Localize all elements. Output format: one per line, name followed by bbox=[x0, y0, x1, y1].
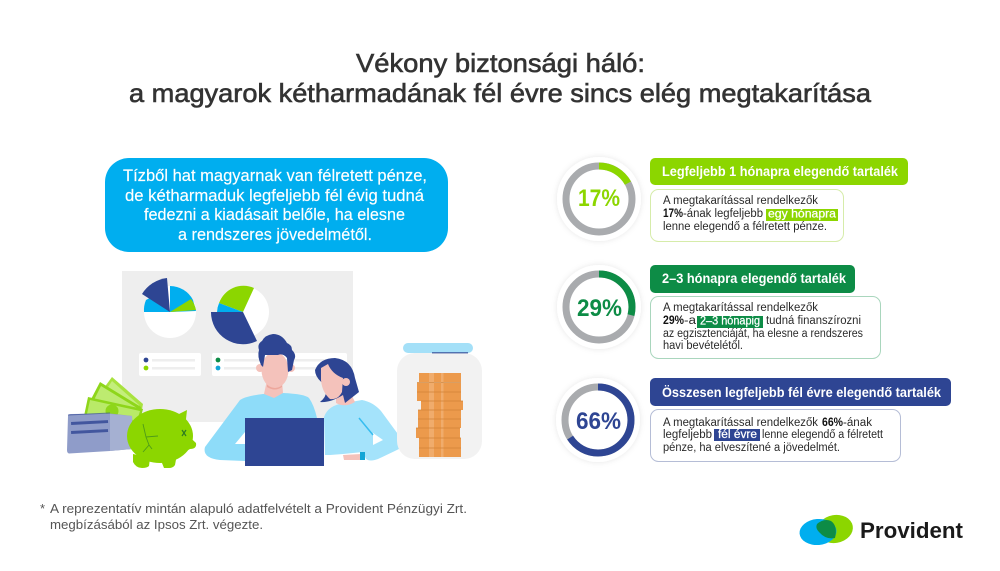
donut: 66%: 66% bbox=[576, 408, 621, 435]
panel: grey chart board bbox=[122, 271, 353, 422]
icon: wallet with banknotes bbox=[67, 377, 143, 454]
logo: Provident: Provident bbox=[860, 518, 963, 543]
text block: 17%: lenne elegendő a félretett pénze. bbox=[663, 221, 827, 233]
text block: 66%: 66% bbox=[822, 417, 843, 429]
icon: savings jar with coin stack bbox=[397, 343, 482, 459]
text block: 29%: -a bbox=[684, 315, 697, 327]
title bbox=[129, 48, 872, 108]
donut: 17%: 17% bbox=[578, 185, 620, 212]
text block: 29% bbox=[650, 296, 880, 358]
text block: 29%: 29% bbox=[663, 315, 684, 327]
text block: 66%: fél évre bbox=[718, 429, 757, 441]
pie chart: right bbox=[211, 286, 269, 344]
heading: 29% bbox=[650, 265, 855, 293]
text block: 66%: lenne elegendő a félretett bbox=[762, 429, 884, 441]
text block: 17%: egy hónapra bbox=[768, 208, 837, 220]
text block: 29%: tudná finanszírozni bbox=[766, 315, 861, 327]
donut: 66% bbox=[556, 378, 640, 462]
donut: 29%: 29% bbox=[577, 295, 622, 322]
callout: summary bubble: a rendszeres jövedelmétől. bbox=[178, 225, 372, 244]
icon: woman bbox=[315, 358, 404, 460]
heading: 66% bbox=[650, 378, 951, 406]
footnote: megbízásából az Ipsos Zrt. végezte. bbox=[50, 517, 263, 532]
callout: summary bubble: Tízből hat magyarnak van félretett pénze, bbox=[123, 166, 427, 185]
footnote bbox=[40, 501, 467, 532]
pie chart: left bbox=[142, 278, 196, 338]
callout: summary bubble: fedezni a kiadásait belőle, ha elesne bbox=[144, 205, 405, 224]
logo: Provident bbox=[798, 512, 963, 547]
heading: 17% bbox=[650, 158, 908, 185]
panel: 66% row bbox=[556, 378, 951, 462]
text block: 29%: az egzisztenciáját, ha elesne a rendszeres bbox=[663, 328, 863, 340]
text block: 66%: pénze, ha elveszítené a jövedelmét. bbox=[663, 442, 840, 454]
donut: 17% bbox=[557, 157, 641, 241]
text block: 17%: 17% bbox=[663, 208, 683, 220]
text block: 17%: A megtakarítással rendelkezők bbox=[663, 195, 818, 207]
text block: 29%: havi bevételétől. bbox=[663, 340, 743, 352]
text block: 66%: -ának bbox=[843, 417, 872, 429]
callout: summary bubble bbox=[105, 158, 448, 252]
text block: 66% bbox=[650, 410, 900, 462]
text block: 66%: A megtakarítással rendelkezők bbox=[663, 417, 818, 429]
icon: laptop bbox=[245, 418, 324, 466]
footnote: * bbox=[40, 501, 45, 516]
icon: cracked piggy bank bbox=[127, 409, 196, 468]
legend card: left bbox=[139, 353, 201, 376]
panel: 29% row bbox=[557, 265, 880, 358]
text block: 66%: legfeljebb bbox=[663, 429, 712, 441]
title: a magyarok kétharmadának fél évre sincs elég megtakarítása bbox=[129, 78, 872, 108]
text block: 17% bbox=[650, 190, 844, 242]
title: Vékony biztonsági háló: bbox=[356, 48, 645, 78]
callout: summary bubble: de kétharmaduk legfeljebb fél évig tudná bbox=[125, 186, 425, 205]
heading: 29%: 2–3 hónapra elegendő tartalék bbox=[662, 270, 846, 286]
icon: man bbox=[205, 334, 317, 461]
illustration: people with savings bbox=[67, 271, 482, 468]
footnote: A reprezentatív mintán alapuló adatfelvételt a Provident Pénzügyi Zrt. bbox=[50, 501, 467, 516]
text block: 29%: A megtakarítással rendelkezők bbox=[663, 302, 818, 314]
heading: 66%: Összesen legfeljebb fél évre elegendő tartalék bbox=[662, 384, 941, 400]
text block: 29%: 2–3 hónapig bbox=[700, 316, 760, 328]
donut: 29% bbox=[557, 265, 641, 349]
panel: 17% row bbox=[557, 157, 908, 242]
heading: 17%: Legfeljebb 1 hónapra elegendő tartalék bbox=[662, 163, 898, 179]
legend card: right bbox=[212, 353, 347, 376]
text block: 17%: -ának legfeljebb bbox=[683, 208, 763, 220]
